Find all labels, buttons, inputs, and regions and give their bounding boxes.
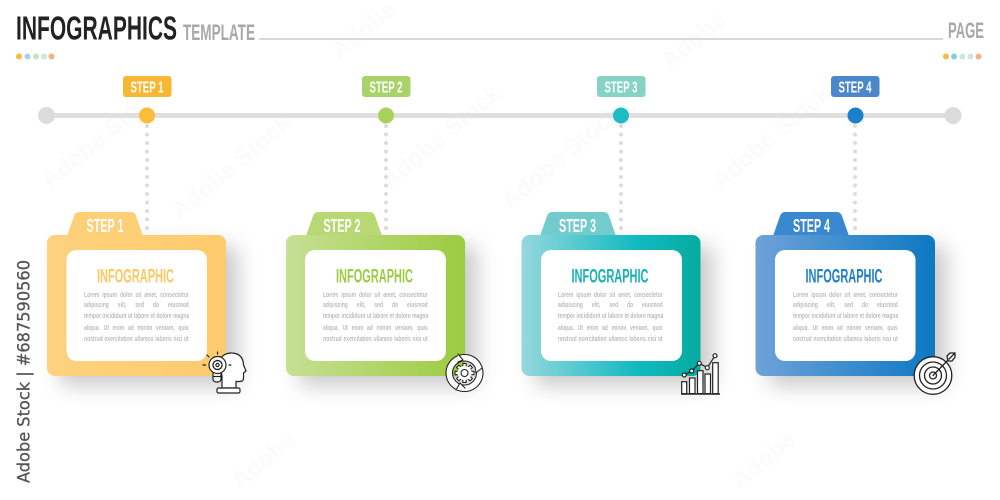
body text: step 3: tempor incididunt ut labore et dolore magna [558, 310, 663, 320]
panel: step 1 card: INFOGRAPHIC [97, 266, 174, 288]
right colour dots [943, 54, 982, 60]
background watermark: Adobe Stock [37, 79, 167, 195]
body text: step 4: adipiscing elit, sed do eiusmod [793, 300, 898, 309]
step badge 4 [831, 76, 880, 97]
step badge 2 [362, 76, 410, 97]
body text: step 1: aliqua. Ut enim ad minim veniam, quis [84, 322, 189, 332]
body text: step 4: Lorem ipsum dolor sit amet, consectetur [793, 290, 898, 299]
stock id watermark: Adobe Stock | #687590560 [14, 260, 34, 483]
body text: step 4: tempor incididunt ut labore et dolore magna [793, 310, 898, 320]
panel: step 1 card: STEP 1 [86, 216, 124, 236]
panel: step 3 card: STEP 3 [559, 216, 596, 236]
panel: step 3 card [522, 212, 713, 386]
body text: step 2 [323, 290, 429, 346]
icon: target with arrow [914, 353, 955, 394]
body text: step 2: Lorem ipsum dolor sit amet, consectetur [323, 290, 428, 299]
body text: step 2: nostrud exercitation ullamco laboris nisi ut [323, 334, 428, 343]
icon: head with light bulb [203, 352, 246, 393]
background watermark [37, 0, 837, 495]
body text: step 4: aliqua. Ut enim ad minim veniam, quis [793, 322, 898, 332]
background watermark: Adobe Stock [377, 79, 507, 195]
step badge 4: STEP 4 [838, 80, 872, 96]
background watermark: Adobe Stock [497, 99, 627, 215]
dotted connectors [147, 126, 855, 236]
header rule [259, 38, 943, 40]
body text: step 1: nostrud exercitation ullamco laboris nisi ut [84, 334, 189, 343]
left colour dots [16, 54, 54, 60]
body text: step 4 [793, 290, 899, 346]
step badge 1 [123, 76, 172, 97]
panel: step 2 card: STEP 2 [324, 216, 360, 236]
panel: step 2 card [286, 212, 477, 386]
panel: step 4 card: INFOGRAPHIC [806, 266, 882, 288]
body text: step 2: tempor incididunt ut labore et dolore magna [323, 310, 428, 320]
body text: step 2: aliqua. Ut enim ad minim veniam, quis [323, 322, 428, 332]
title: INFOGRAPHICS [16, 10, 177, 46]
body text: step 3: aliqua. Ut enim ad minim veniam, quis [558, 322, 663, 332]
background watermark: Adobe [727, 426, 801, 495]
body text: step 4: nostrud exercitation ullamco laboris nisi ut [793, 334, 898, 343]
step badge 2: STEP 2 [370, 80, 403, 96]
step badge 3 [597, 76, 646, 97]
body text: step 1: tempor incididunt ut labore et dolore magna [84, 310, 189, 320]
body text: step 3 [558, 290, 664, 346]
body text: step 3: Lorem ipsum dolor sit amet, consectetur [558, 290, 663, 299]
step badge 3: STEP 3 [604, 80, 638, 96]
title: TEMPLATE [183, 20, 255, 45]
timeline [38, 107, 962, 124]
body text: step 1: adipiscing elit, sed do eiusmod [84, 300, 189, 309]
panel: step 4 card [756, 212, 947, 386]
background watermark: Adobe [657, 6, 731, 75]
panel: step 4 card: STEP 4 [793, 216, 830, 236]
background watermark: Adobe Stock [167, 109, 297, 225]
body text: step 1 [84, 290, 190, 346]
background watermark: Adobe Stock [707, 79, 837, 195]
icon: rising bar chart [681, 354, 720, 394]
background watermark: Adobe [227, 426, 301, 495]
body text: step 3: nostrud exercitation ullamco laboris nisi ut [558, 334, 663, 343]
panel: step 2 card: INFOGRAPHIC [336, 266, 413, 288]
body text: step 1: Lorem ipsum dolor sit amet, consectetur [84, 290, 189, 299]
body text: step 2: adipiscing elit, sed do eiusmod [323, 300, 428, 309]
panel: step 3 card: INFOGRAPHIC [572, 266, 648, 288]
panel: step 1 card [47, 212, 238, 386]
step badge 1: STEP 1 [130, 80, 164, 96]
icon: gear in circular arrows [446, 354, 483, 392]
body text: step 3: adipiscing elit, sed do eiusmod [558, 300, 663, 309]
